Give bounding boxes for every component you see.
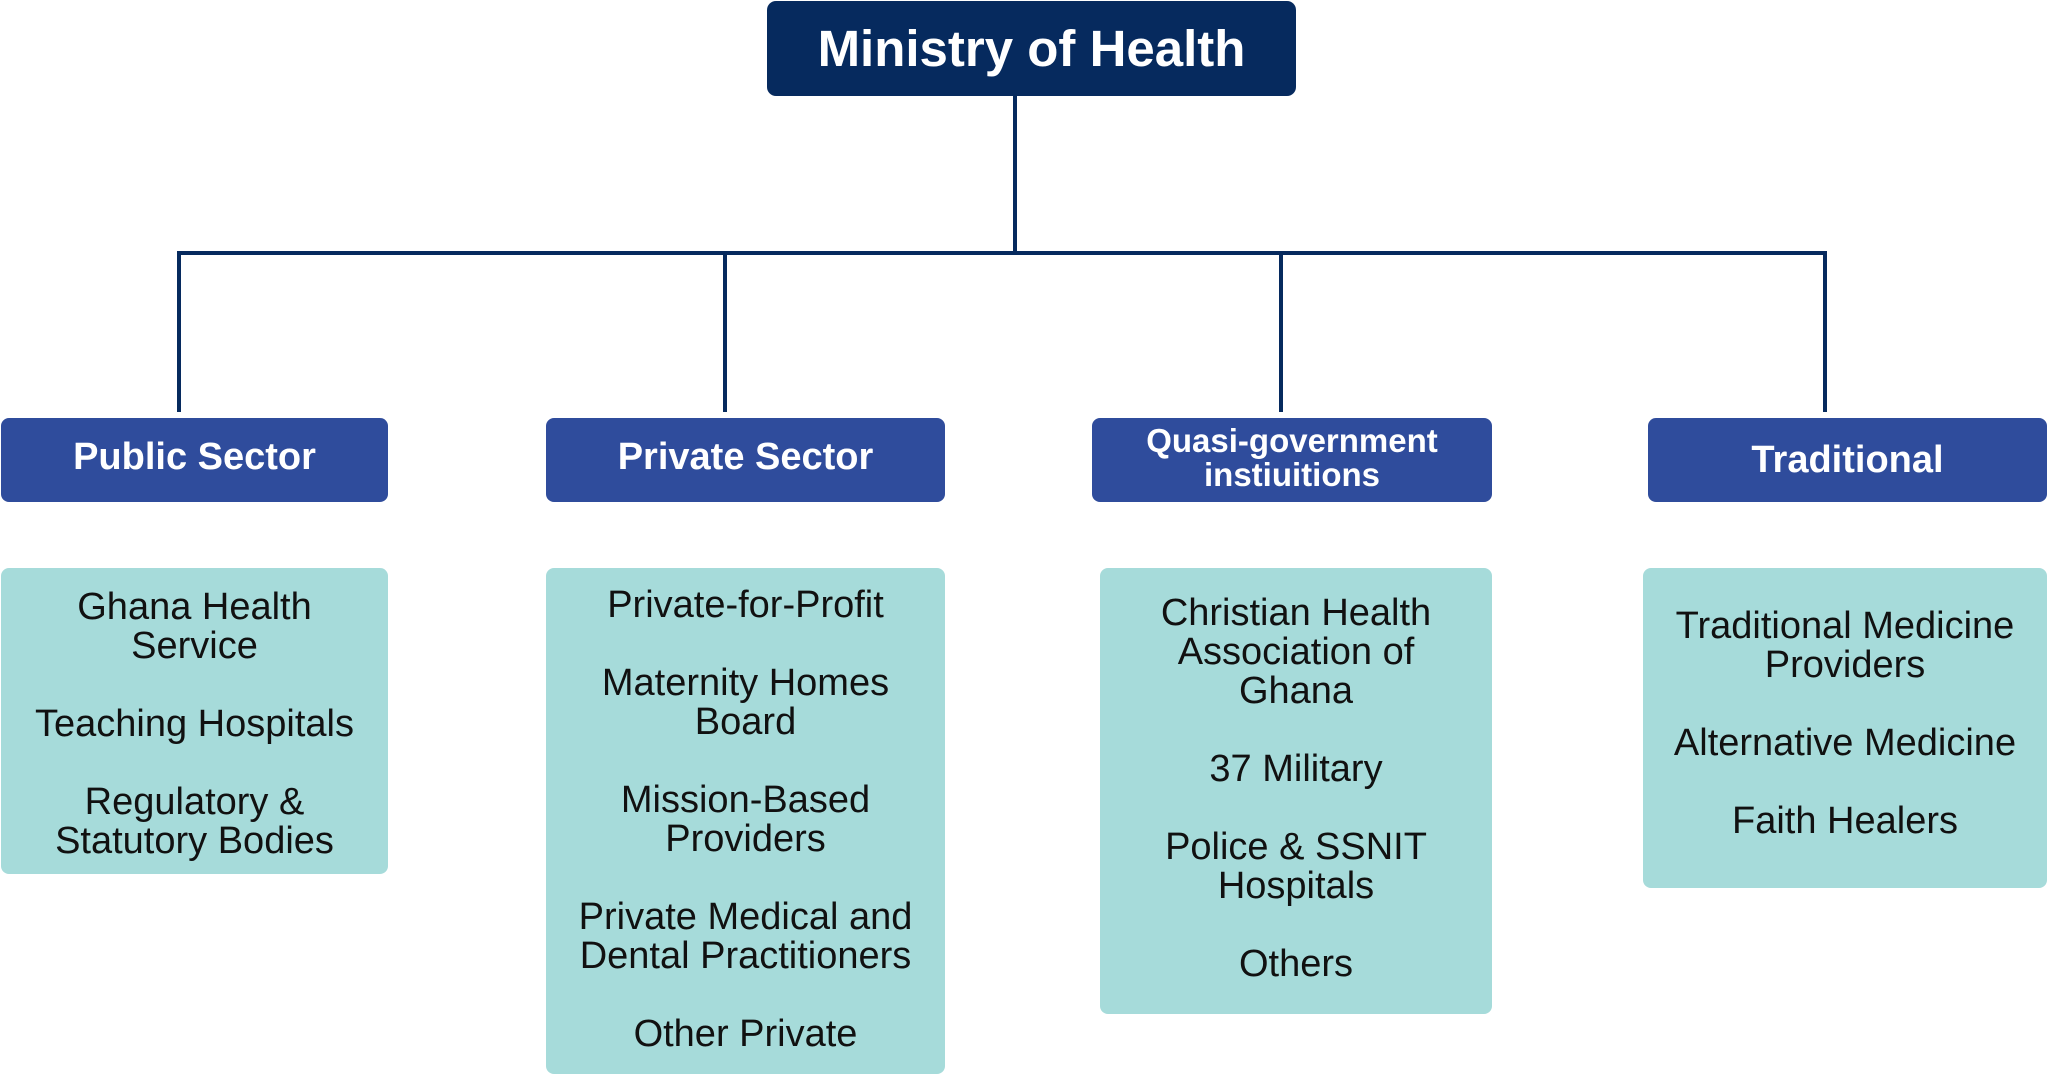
panel: traditional items: Traditional Medicine — [1676, 605, 2014, 647]
panel: public sector items: Regulatory & — [85, 781, 304, 823]
panel: quasi-government items: Christian Health — [1161, 592, 1431, 634]
panel: quasi-government items: 37 Military — [1209, 748, 1383, 790]
panel: quasi-government items: Ghana — [1239, 670, 1353, 712]
panel: public sector items: Statutory Bodies — [55, 820, 334, 862]
header: quasi-government: Quasi-government — [1146, 422, 1438, 459]
panel: private sector items: Other Private — [634, 1013, 857, 1055]
panel: private sector items — [546, 568, 945, 1074]
panel: traditional items: Alternative Medicine — [1674, 722, 2016, 764]
title: Ministry of Health — [818, 20, 1245, 77]
panel: traditional items — [1643, 568, 2047, 888]
panel: private sector items: Maternity Homes — [602, 662, 889, 704]
header: traditional: Traditional — [1751, 439, 1944, 481]
panel: private sector items: Mission-Based — [621, 779, 870, 821]
panel: public sector items: Teaching Hospitals — [35, 703, 354, 745]
header: private sector — [546, 418, 945, 502]
panel: quasi-government items: Police & SSNIT — [1165, 826, 1427, 868]
panel: quasi-government items: Hospitals — [1218, 865, 1374, 907]
panel: private sector items: Dental Practitioners — [580, 935, 911, 977]
panel: traditional items: Faith Healers — [1732, 800, 1958, 842]
panel: quasi-government items — [1100, 568, 1492, 1014]
header: private sector: Private Sector — [618, 436, 873, 478]
header: public sector — [1, 418, 388, 502]
panel: quasi-government items: Others — [1239, 943, 1353, 985]
panel: private sector items: Board — [695, 701, 796, 743]
panel: private sector items: Private-for-Profit — [607, 584, 884, 626]
panel: traditional items: Providers — [1765, 644, 1925, 686]
panel: public sector items: Service — [131, 625, 258, 667]
header: quasi-government — [1092, 418, 1492, 502]
panel: public sector items: Ghana Health — [77, 586, 312, 628]
panel: private sector items: Private Medical and — [579, 896, 912, 938]
panel: public sector items — [1, 568, 388, 874]
panel: private sector items: Providers — [665, 818, 826, 860]
panel: quasi-government items: Association of — [1178, 631, 1414, 673]
header: public sector: Public Sector — [73, 436, 316, 478]
header: quasi-government: instiuitions — [1204, 456, 1380, 493]
header: traditional — [1648, 418, 2047, 502]
title — [767, 1, 1296, 96]
